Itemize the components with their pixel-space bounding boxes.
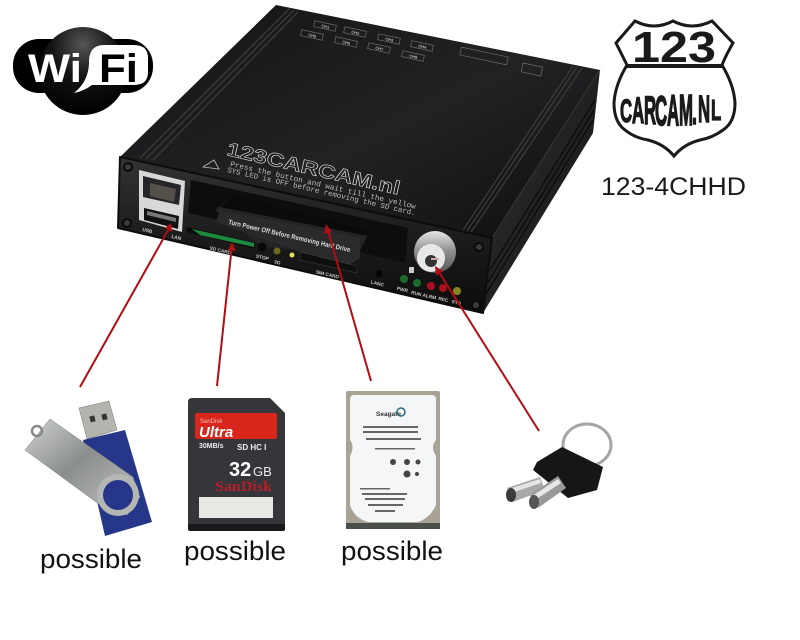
icon: SD card: [188, 398, 285, 531]
icon: SD card: Ultra: [199, 424, 233, 441]
port labels: LAN: [171, 234, 182, 242]
icon: WiFi logo: [13, 27, 153, 115]
port labels: PWR: [396, 286, 409, 294]
logo: 123 CARCAM.NL shield: N: [698, 88, 710, 131]
LANC jack: [376, 270, 382, 278]
LAN and USB ports: [139, 170, 185, 232]
logo: 123 CARCAM.NL shield: 123: [632, 23, 716, 72]
icon: SD card: 32: [229, 459, 251, 481]
icon: SD card: GB: [253, 464, 272, 479]
SD card slot: [187, 227, 255, 249]
arrow: key: [435, 266, 539, 431]
device top face: CH7: [375, 45, 384, 52]
brand imprint: 123CARCAM.nl: [225, 139, 402, 200]
warning imprint: Press the button and wait till the yellow: [229, 161, 417, 212]
icon: hard disk: Seagate: [376, 411, 401, 418]
device top face: CH2: [351, 29, 360, 36]
port labels: ALRM: [422, 293, 437, 302]
logo: 123 CARCAM.NL shield: M: [679, 87, 693, 136]
caption: SD card: possible: [184, 536, 286, 566]
key lock: [409, 231, 456, 273]
model name: 123-4CHHD: [601, 173, 746, 201]
corner screws: [123, 163, 483, 309]
port labels: [142, 227, 462, 307]
device top face: CH3: [385, 36, 394, 43]
logo: 123 CARCAM.NL shield: A: [667, 87, 679, 136]
logo: 123 CARCAM.NL shield: .: [692, 91, 697, 133]
arrow: hard drive: [324, 224, 371, 381]
device side face: [483, 70, 600, 313]
device top face: [120, 5, 600, 238]
icon: USB stick: [25, 401, 152, 536]
port labels: REC: [438, 296, 449, 304]
hard drive tray: Turn Power Off Before Removing Hard Drive: [228, 219, 351, 254]
icon: keys: [506, 424, 611, 509]
hard drive tray: [188, 180, 408, 268]
icon: SD card: SD HC I: [237, 443, 266, 452]
device top face: CH6: [342, 39, 351, 46]
device: 4 channel HDD recorder: [118, 5, 600, 313]
logo: 123 CARCAM.NL shield: A: [632, 91, 644, 132]
icon: hard disk: [346, 391, 440, 529]
port labels: RUN: [410, 290, 422, 298]
device top face: CH1: [321, 23, 330, 30]
warning imprint: SYS LED is OFF before removing the SD card.: [226, 167, 416, 218]
device front face: [118, 157, 492, 313]
port labels: SIM CARD: [315, 269, 340, 281]
caption: USB: possible: [40, 544, 142, 574]
icon: SD card: SanDisk: [200, 419, 223, 425]
port labels: SYS: [451, 299, 462, 307]
arrow: USB: [80, 223, 172, 387]
arrows: connections from media to device slots: [80, 223, 539, 431]
device top face: CH4: [418, 43, 427, 50]
icon: SD card: SanDisk: [215, 479, 273, 495]
logo: 123 CARCAM.NL shield: C: [620, 92, 632, 130]
device top face: CH8: [409, 53, 418, 60]
icon: WiFi logo: Fi: [99, 47, 138, 91]
status LEDs: [400, 275, 461, 295]
caption: hard disk: possible: [341, 536, 443, 566]
logo: 123 CARCAM.NL shield: L: [711, 94, 721, 126]
port labels: STOP: [255, 254, 270, 263]
SIM card slot: [300, 252, 357, 273]
port labels: USB: [142, 227, 153, 235]
port labels: 3G: [273, 259, 281, 267]
arrow: SD card: [217, 242, 236, 386]
stop button and 3G indicators: [258, 242, 294, 258]
device top face: CH5: [308, 32, 317, 39]
port labels: SD CARD: [209, 246, 232, 257]
port labels: LANC: [370, 280, 385, 289]
logo: 123 CARCAM.NL shield: C: [655, 87, 667, 134]
icon: SD card: 30MB/s: [199, 443, 224, 450]
icon: WiFi logo: Wi: [28, 47, 82, 91]
logo: 123 CARCAM.NL shield: [614, 21, 735, 156]
logo: 123 CARCAM.NL shield: R: [644, 89, 656, 133]
